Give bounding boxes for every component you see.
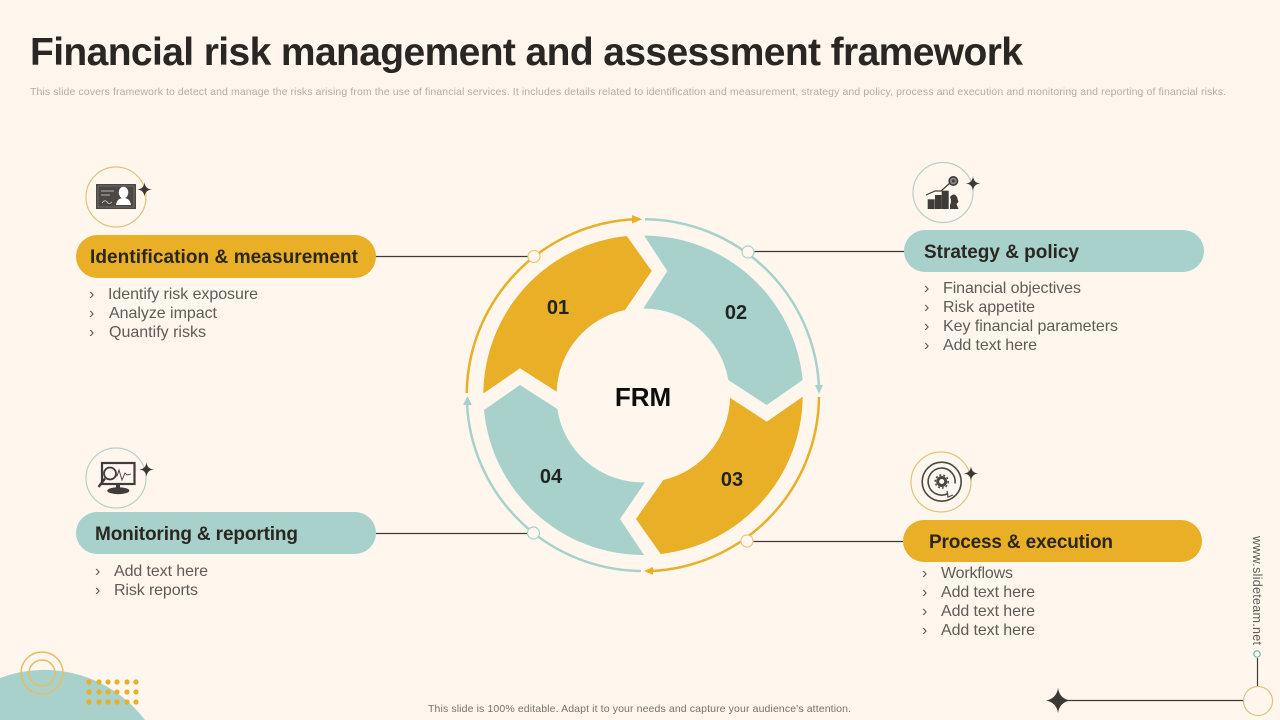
panel: strategy and policy [904,162,1204,354]
connector: identification [376,250,540,262]
bullet list: › [924,280,929,297]
subtitle description: This slide covers framework to detect and manage the risks arising from the use of financial services. It includes details related to identification and measurement, strategy and policy, process and execution and monitoring and reporting of financial risks. [30,86,1226,98]
bullet list: › [922,622,927,639]
bullet list: Add text here [941,584,1035,601]
bullet list: Add text here [943,337,1037,354]
bullet list: › [924,318,929,335]
bullet list: › [89,305,94,322]
segment 01 [483,236,652,394]
panel: process and execution [903,452,1202,639]
bullet list [89,286,258,341]
outer arrow arc 02 [645,219,823,394]
bullet list: › [924,337,929,354]
bullet list: Analyze impact [109,305,218,322]
bullet list: Add text here [941,622,1035,639]
bullet list: › [922,603,927,620]
heading pill: Strategy & policy [924,242,1079,263]
icon: growth chart with chess knight [913,162,980,222]
decoration: bottom right star and line [1046,651,1272,716]
heading pill: Monitoring & reporting [95,524,298,545]
center label FRM: FRM [615,382,671,412]
bullet list [924,280,1118,354]
bullet list: › [89,286,94,303]
icon: gear in rotating rings [911,452,978,512]
bullet list [922,565,1035,639]
bullet list: › [922,584,927,601]
segment 01: 01 [547,297,569,319]
bullet list [95,563,208,599]
segment 03: 03 [721,469,743,491]
segment 04: 04 [540,466,563,488]
segment 04 [484,385,645,555]
bullet list: Identify risk exposure [108,286,258,303]
panel: monitoring and reporting [76,448,376,599]
bullet list: Financial objectives [943,280,1081,297]
outer arrow arc 04 [463,396,641,571]
heading pill [76,235,376,278]
bullet list: › [89,324,94,341]
bullet list: Risk appetite [943,299,1035,316]
title: Financial risk management and assessment framework [30,31,1023,74]
bullet list: › [95,563,100,580]
heading pill [904,230,1204,272]
website url: www.slideteam.net [1250,535,1264,646]
segment 03 [636,397,803,554]
footer note: This slide is 100% editable. Adapt it to your needs and capture your audience's attention. [428,703,851,715]
segment 02: 02 [725,302,747,324]
bullet list: › [924,299,929,316]
bullet list: Risk reports [114,582,198,599]
segment 02 [643,236,803,405]
panel: identification and measurement [76,167,376,341]
bullet list: › [95,582,100,599]
connector: strategy [742,246,904,258]
heading pill [76,512,376,554]
heading pill: Process & execution [929,532,1113,553]
heading pill [903,520,1202,562]
heading pill: Identification & measurement [90,247,359,268]
bullet list: › [922,565,927,582]
bullet list: Add text here [941,603,1035,620]
bullet list: Workflows [941,565,1013,582]
outer arrow arc 01 [467,215,642,393]
bullet list: Add text here [114,563,208,580]
icon: monitor with magnifier [86,448,154,508]
central cycle diagram [463,215,823,575]
outer arrow arc 03 [644,397,819,575]
icon: id card [86,167,152,227]
connector: process [741,535,903,547]
bullet list: Key financial parameters [943,318,1118,335]
connector: monitoring [376,527,540,539]
decoration: bottom left shapes [0,652,145,720]
bullet list: Quantify risks [109,324,206,341]
